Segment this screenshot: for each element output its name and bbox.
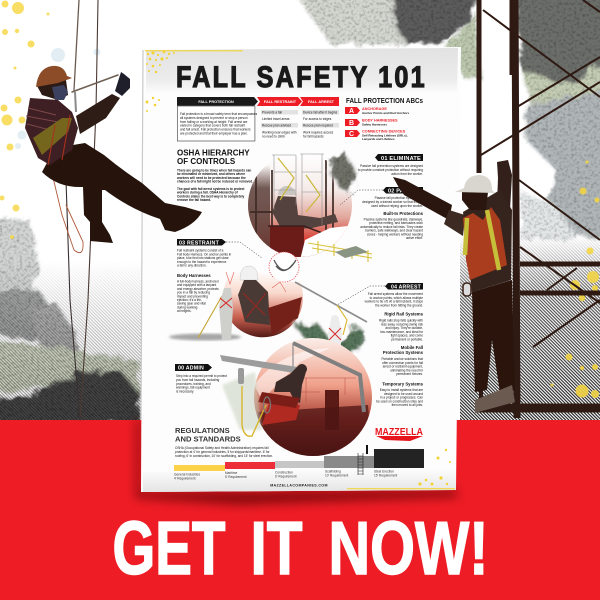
- standing figure: [366, 445, 368, 454]
- tag: [175, 364, 212, 371]
- ladder: [358, 453, 363, 475]
- A tag: [345, 107, 360, 114]
- scaffold tower: [475, 0, 600, 418]
- fall restraint tab: [257, 97, 302, 106]
- OSHA intro text: Controls states the best way is to completely: [177, 194, 244, 198]
- fall protection tab label: FALL PROTECTION: [198, 100, 234, 104]
- text: Fall arrest systems allow the movement: [368, 292, 423, 296]
- fall arrest tab label: FALL ARREST: [308, 100, 335, 104]
- body harness text: saving gear and vital: [177, 302, 206, 306]
- connecting devices: CONNECTING DEVICES: [362, 130, 406, 134]
- rigid rail text: and injury. They're durable,: [385, 326, 423, 330]
- red harness: [220, 298, 232, 308]
- poster splatter: [145, 50, 455, 489]
- helmet: [36, 66, 72, 87]
- mid grey bar: [324, 456, 374, 468]
- building lines: [296, 378, 356, 402]
- circle: [254, 338, 372, 456]
- white paint splash: [300, 226, 348, 257]
- mobile text: offer connection points for fall: [382, 361, 423, 365]
- diagonal braces: [481, 0, 600, 347]
- body harness text: ejection; it's a life-: [177, 298, 202, 302]
- C tag: [345, 130, 360, 137]
- main post: [513, 0, 517, 418]
- text: enough to the hazard to experience: [177, 260, 227, 264]
- yellow paint splatter left: [0, 0, 50, 239]
- step 03 restraint: [177, 239, 232, 313]
- text: workers to tie off. At a fall incident, it stops: [365, 300, 423, 304]
- tag: [177, 239, 226, 246]
- text: you from fall hazards, including: [176, 378, 220, 382]
- hook: [264, 397, 270, 413]
- background: halftone lower right: [460, 235, 600, 420]
- rigid rail text: low-maintenance, and ideal for: [380, 330, 423, 334]
- dark platform: [270, 226, 304, 258]
- harness sketch: [274, 260, 296, 271]
- body harness text: at heights.: [177, 309, 192, 313]
- B tag: [345, 119, 360, 126]
- definition text: all systems designed to prevent or stop a person: [180, 116, 248, 120]
- black bar: [374, 449, 424, 468]
- poster grain bottom: [143, 469, 456, 492]
- guard rail illustration: [308, 241, 372, 262]
- fall restraint tab label: FALL RESTRAINT: [264, 100, 297, 104]
- call to action: [112, 506, 488, 590]
- yellow bar: [174, 465, 225, 471]
- red bar: [225, 462, 275, 469]
- harnesses detail: Safety Harnesses: [362, 122, 387, 126]
- scaffolding sketch: [272, 154, 324, 225]
- temporary text: Easy to install systems that are: [380, 388, 423, 392]
- lanyard: [337, 305, 347, 335]
- bar labels: 5' Requirement: [225, 475, 247, 479]
- bar labels: Maritime: [225, 471, 237, 475]
- OSHA intro text: workers will need to be protected because the: [176, 176, 246, 180]
- connecting detail: Self Retracting Lifelines (SRLs),: [362, 134, 408, 138]
- OSHA intro text: workers during a fall. OSHA Hierarchy of: [176, 191, 239, 195]
- text: Full body Harness. On anchor points in: [177, 252, 232, 256]
- OSHA intro text: There are going to be times when fall hazards can: [177, 168, 251, 172]
- body harness text: during working: [177, 305, 198, 309]
- white top blend: [254, 348, 330, 400]
- bar labels: [174, 470, 397, 480]
- pole: [198, 296, 222, 338]
- face: [37, 80, 68, 100]
- pale blue splatter left: [15, 48, 100, 149]
- OSHA heading: OSHA HIERARCHY: [177, 148, 250, 158]
- restraint rows: Working near edges with: [262, 130, 297, 134]
- bar labels: Scaffolding: [325, 470, 341, 474]
- tag label: 04 ARREST: [391, 285, 422, 291]
- beam: [220, 355, 304, 374]
- OSHA intro text: be eliminated or minimized, and others where: [177, 172, 245, 176]
- arrest rows: [302, 110, 339, 138]
- bright red panel: [262, 404, 300, 425]
- poster shadow: [136, 420, 458, 505]
- tag: [385, 283, 423, 290]
- built-in heading: Built-In Protections: [383, 211, 424, 216]
- pointing arm: [393, 177, 452, 220]
- bar labels: 15' Requirement: [374, 474, 397, 478]
- rigid rail text: tight spaces, and come: [391, 334, 423, 338]
- red band: [0, 420, 600, 600]
- restraint rows: Rescue plan advised: [262, 124, 291, 128]
- illustration: rail with arrest worker: [293, 282, 367, 362]
- mobile text: arrest or restraint equipment,: [383, 365, 423, 369]
- hard hat: [455, 175, 495, 193]
- belt ring: [463, 283, 471, 296]
- poster: [141, 47, 461, 492]
- illustration: admin lanyard: [222, 368, 270, 436]
- tag: [383, 187, 423, 194]
- restraint rows: Prevents a fall: [262, 110, 282, 114]
- crane post: [292, 343, 294, 372]
- built-in text: automatically to reduce fall risks. They create: [360, 225, 423, 229]
- door: [325, 390, 339, 430]
- restraint rows: Limited travel areas: [262, 117, 290, 121]
- built-in text: Passive systems like guardrails, stairways,: [364, 218, 423, 222]
- definition text: varied in category that covers both fall restraint: [180, 124, 245, 128]
- glove at mask: [52, 85, 68, 100]
- text: Step into a required permit to protect: [176, 374, 227, 378]
- glove: [115, 72, 130, 96]
- connector: [238, 368, 244, 384]
- ABCs heading: FALL PROTECTION ABCs: [346, 96, 423, 105]
- definition text: and fall arrest. Fall protection ensures that workers: [180, 128, 251, 132]
- background: rock texture top right: [292, 0, 600, 240]
- rock cluster: [328, 150, 358, 195]
- OSHA heading: OF CONTROLS: [177, 157, 236, 166]
- wash: [222, 372, 262, 430]
- worker back with harness: [238, 280, 270, 325]
- crane arm: [293, 343, 364, 412]
- rigid rail text: permanent or portable.: [391, 338, 423, 342]
- mobile text: permanent fixtures.: [396, 372, 423, 376]
- harness straps: [48, 115, 70, 165]
- vest stripes: [465, 210, 499, 270]
- mobile heading: Protection Systems: [383, 350, 424, 355]
- tag: [375, 154, 423, 161]
- bar labels: Steel Erection: [374, 470, 394, 474]
- text: protection at 4' for general industries, 5 for shipyards/maritime, 6' for: [175, 450, 270, 454]
- A letter: A: [349, 108, 354, 115]
- illustration: admin circle: [220, 338, 372, 456]
- horizontal rails: [520, 264, 600, 293]
- boots: [475, 385, 515, 413]
- definition text: Fall protection is a broad safety term that encompasses: [180, 112, 258, 116]
- sweater: [25, 98, 78, 165]
- bar labels: 4' Requirement: [174, 476, 196, 480]
- harness straps: [243, 293, 266, 318]
- worker on beam: [274, 364, 307, 403]
- step 02 passive: [360, 187, 424, 240]
- rope worker (left): [25, 0, 202, 420]
- Mazzella logo: [375, 426, 423, 441]
- worker: [328, 315, 342, 360]
- built-in text: active effort.: [406, 236, 423, 240]
- illustration: eliminate circle: [248, 150, 358, 260]
- dashed connectors: [226, 190, 385, 305]
- harness: [329, 328, 341, 340]
- anchorage detail: Anchor Points and Roof Anchors: [362, 111, 410, 115]
- website: MAZZELLACOMPANIES.COM: [270, 484, 328, 488]
- heading: REGULATIONS: [175, 426, 230, 435]
- scaffold posts: [250, 160, 333, 250]
- fall protection tab: [177, 97, 258, 106]
- illustration: harnessed worker on ground: [169, 288, 241, 340]
- text: procedures, training, and: [176, 382, 211, 386]
- restraint rows: [261, 110, 298, 138]
- call to action: IT: [250, 506, 302, 590]
- red sketch marks: [226, 272, 286, 292]
- legs: [42, 143, 202, 243]
- text: roofing, 6' in construction, 10' for scaffolding, and 15' for steel erection.: [175, 454, 273, 458]
- raised arm: [497, 160, 512, 210]
- poster edge: [141, 50, 143, 420]
- mobile heading: Mobile Fall: [401, 345, 423, 350]
- roof deck: [268, 297, 302, 335]
- circle: [223, 270, 303, 337]
- ground: [169, 334, 241, 340]
- text: OSHA (Occupational Safety and Health Administration) requires fall: [175, 446, 269, 450]
- arm to rope: [76, 94, 120, 134]
- comparison table: [177, 97, 339, 141]
- sweater stripes: [26, 108, 58, 130]
- left post: [476, 0, 482, 173]
- text: is necessary.: [176, 390, 194, 394]
- yellow paint splatter right: [550, 160, 600, 398]
- regulations and standards: [174, 426, 424, 488]
- definition text: from falling or a working at height. Fall arrest are: [180, 120, 248, 124]
- background: sky: [0, 0, 600, 420]
- arrest rows: Device fall after it begins: [303, 110, 338, 114]
- tag label: 00 ADMIN: [178, 366, 204, 372]
- illustration: restraint circle: [223, 266, 303, 337]
- temporary text: in a project or progresses. Can: [380, 396, 423, 400]
- crouching worker: [272, 186, 338, 230]
- lanyard: [242, 386, 266, 436]
- built-in text: protective netting, and barricades work: [369, 221, 423, 225]
- arrest rows: For access to edges: [303, 117, 332, 121]
- bar labels: General Industries: [174, 472, 200, 476]
- torso: [463, 190, 512, 292]
- text: to anchor points, which allows multiple: [370, 296, 423, 300]
- rail on platform: [268, 225, 322, 233]
- text: to provide constant protection without requiring: [358, 168, 423, 172]
- rigid rail heading: Rigid Rail Systems: [384, 312, 424, 316]
- body harness text: A full-body harness, anchored: [177, 280, 219, 284]
- B letter: B: [349, 120, 354, 127]
- temporary heading: Temporary Systems: [382, 382, 424, 386]
- connecting detail: Lanyards and Lifelines: [362, 137, 395, 141]
- bar labels: 6' Requirement: [275, 474, 297, 478]
- restraint rows: no need to climb: [262, 134, 285, 138]
- arrest rows: Rescue plan required: [303, 124, 333, 128]
- pointing worker (right): [393, 160, 515, 413]
- arrest rows: for fall hazards: [303, 134, 324, 138]
- body harness text: you in a fall by reducing: [177, 291, 210, 295]
- background: rock texture lower left: [0, 218, 140, 425]
- base rail: [475, 404, 600, 412]
- OSHA intro text: remove the fall hazard.: [177, 198, 211, 202]
- text: designed by a trained worker so that they're: [362, 200, 423, 204]
- bar labels: 10' Requirement: [325, 474, 348, 478]
- background: halftone lower left: [0, 260, 145, 420]
- tag label: 03 RESTRAINT: [179, 241, 220, 247]
- step 01 eliminate: [358, 154, 423, 176]
- built-in text: zones - helping workers without needing: [367, 232, 423, 236]
- dark left edge: [248, 166, 270, 248]
- rigid rail text: less sway, reducing swing risk: [381, 322, 423, 326]
- carabiner: [75, 92, 76, 112]
- bar labels: Construction: [275, 470, 293, 474]
- step 04 arrest: [365, 283, 424, 407]
- lower left post: [479, 340, 483, 405]
- temporary text: be used on construction sites and: [376, 399, 423, 403]
- mobile text: eliminating the need for: [390, 368, 423, 372]
- text: Fall restraint systems consist of a: [177, 248, 224, 252]
- face: [462, 190, 488, 210]
- OSHA intro text: The goal with fall arrest systems is to protect: [177, 187, 244, 191]
- step 00 admin: [175, 364, 227, 394]
- text: a fall in any direction.: [177, 264, 207, 268]
- text: used without relying upon the worker.: [371, 204, 423, 208]
- fall arrest tab: [300, 97, 339, 106]
- poster grain top: [146, 48, 458, 94]
- body harness text: and equipped with a lanyard: [177, 283, 217, 287]
- poster title: FALL SAFETY 101: [176, 60, 425, 93]
- text: action from the worker.: [391, 172, 423, 176]
- sleeve: [444, 210, 465, 236]
- body harness heading: Body Harnesses: [177, 273, 211, 278]
- dashed ring: [269, 252, 299, 282]
- text: place, tour tied into stations get close: [177, 256, 229, 260]
- light grey bar: [275, 461, 324, 468]
- body harness text: impact and preventing: [177, 294, 208, 298]
- gradient disc: [248, 171, 352, 257]
- tag label: 01 ELIMINATE: [381, 156, 421, 162]
- worker helmet: [240, 266, 258, 280]
- fall protection ABCs: [345, 96, 423, 141]
- worker: [219, 288, 233, 340]
- trees: [293, 322, 366, 362]
- vest: [463, 207, 507, 280]
- call to action: GET: [112, 506, 226, 590]
- mobile text: Portable anchor solutions that: [381, 357, 423, 361]
- harness detail circle: [269, 252, 299, 282]
- text: warnings, fall equipment: [176, 386, 210, 390]
- arrest rows: Work requires access: [303, 130, 334, 134]
- wordmark: MAZZELLA: [375, 426, 423, 438]
- call to action: NOW!: [328, 506, 488, 590]
- swoosh: [376, 436, 423, 441]
- hi-vis harness: [33, 118, 72, 155]
- built-in text: barriers, safe walkways, and clear hazard: [365, 229, 423, 233]
- definition box: [177, 106, 255, 141]
- rail: [295, 282, 367, 322]
- body harnesses: BODY HARNESSES: [362, 118, 398, 122]
- heading: AND STANDARDS: [175, 434, 241, 444]
- red beam below: [258, 392, 300, 408]
- C letter: C: [349, 131, 354, 138]
- temporary text: designed to be used around: [384, 392, 423, 396]
- text: Passive fall prevention systems are designed: [360, 164, 423, 168]
- text: Passive fall protection systems are: [375, 196, 423, 200]
- tag label: 02 PASSIVE: [388, 189, 421, 195]
- rigid rail text: Rigid rails stop falls quickly with: [379, 318, 423, 322]
- definition text: are protected and that their employer has a plan.: [180, 132, 248, 136]
- circle: [248, 160, 352, 257]
- poster sheet: [141, 47, 461, 492]
- ropes: [50, 0, 118, 420]
- temporary text: then moved to all jobs.: [392, 403, 423, 407]
- text: the worker from hitting the ground.: [375, 303, 423, 307]
- anchorage: ANCHORAGE: [362, 107, 387, 111]
- OSHA intro text: chances of a fall might not be reduced or removed.: [177, 180, 253, 184]
- dark roof: [250, 405, 372, 456]
- body harness text: and energy absorber, protects: [177, 287, 219, 291]
- legs: [472, 280, 515, 393]
